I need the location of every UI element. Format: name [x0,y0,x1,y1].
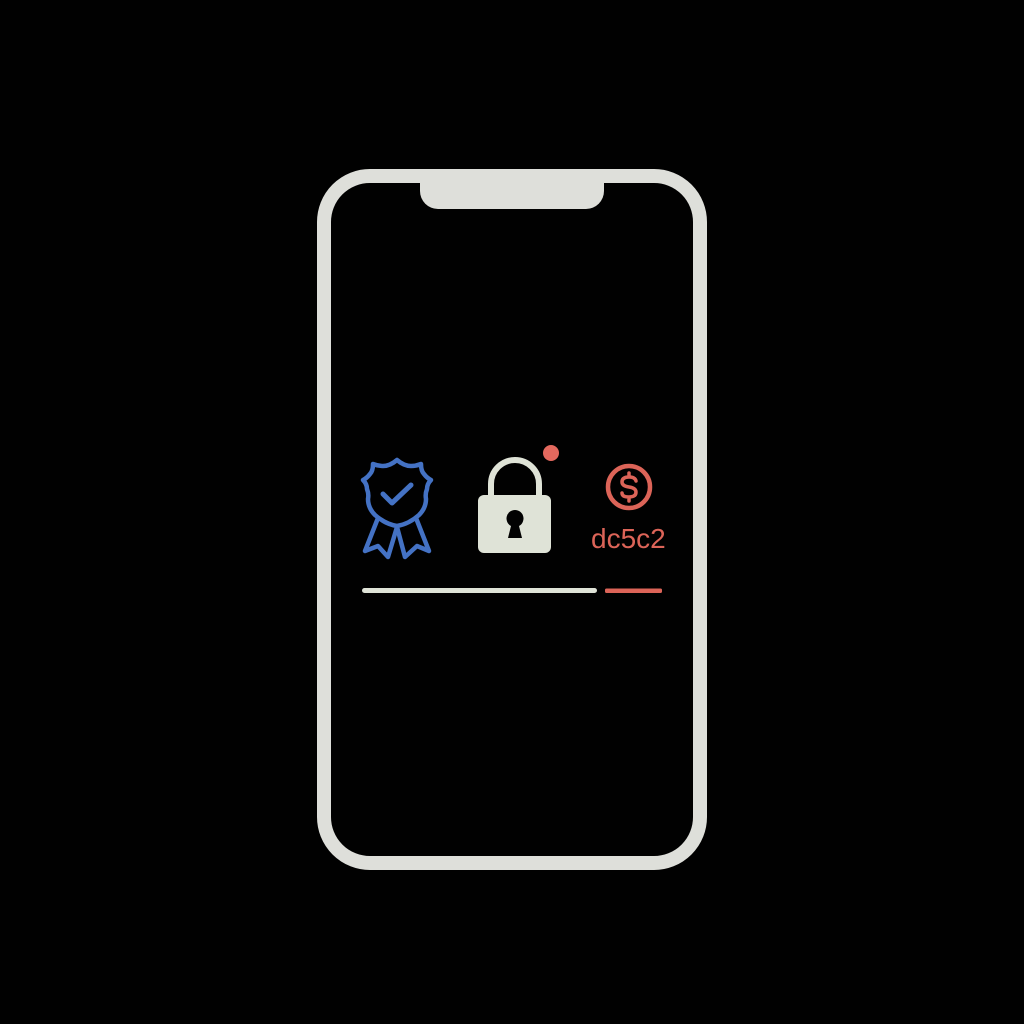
progress bar: light segment [362,588,597,593]
padlock keyhole [506,510,524,538]
icon: award ribbon badge with check [363,460,431,557]
icon: padlock [478,460,551,553]
badge check mark [383,485,411,503]
progress bar: red segment [605,588,662,593]
dollar sign [622,473,636,501]
left ribbon tail [365,518,397,557]
padlock shackle [491,460,539,497]
coin ring [608,466,650,508]
icon: dollar coin [608,466,650,508]
phone notch [420,176,604,209]
badge shield [363,460,431,526]
phone frame [324,176,700,863]
label: dc5c2: dc5c2 [591,523,666,554]
padlock body [478,495,551,553]
right ribbon tail [397,518,429,557]
notification dot [543,445,559,461]
